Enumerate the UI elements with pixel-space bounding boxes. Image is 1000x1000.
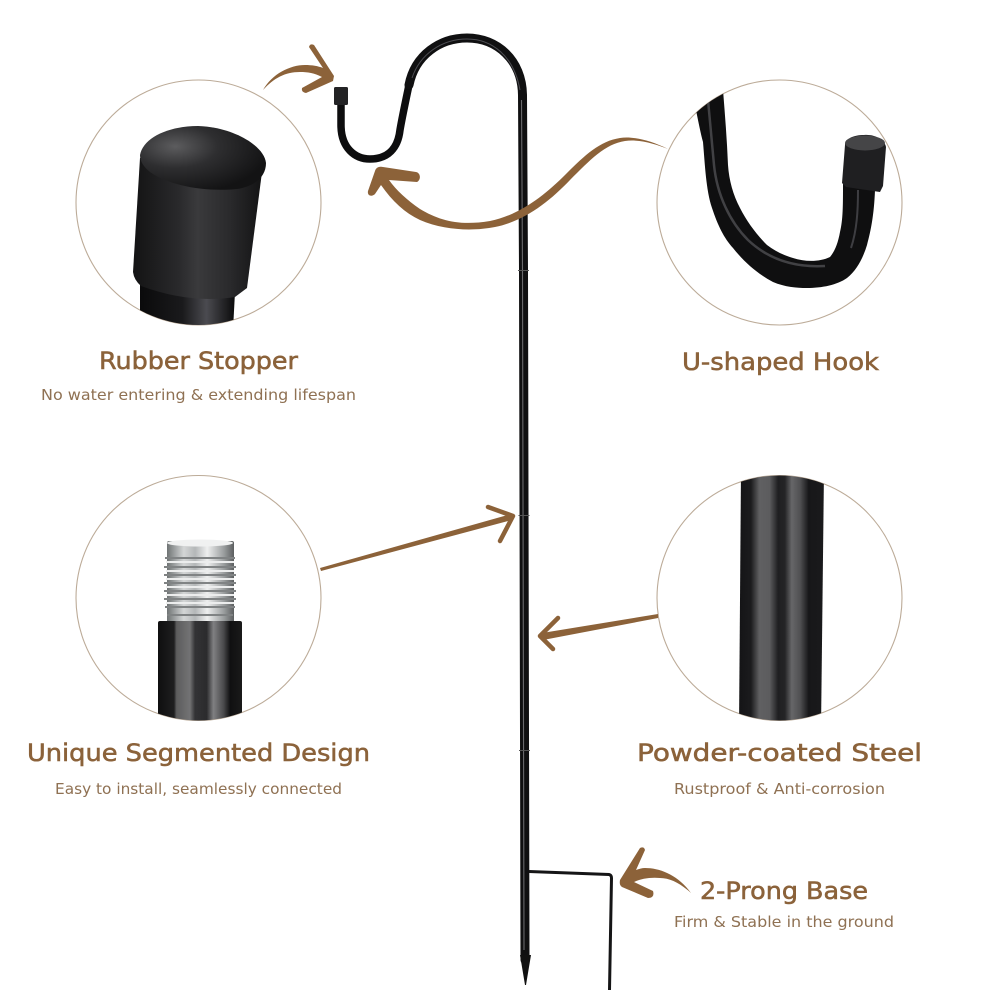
panel: u-shaped hook — [657, 80, 902, 325]
heading: rubber stopper: Rubber Stopper — [99, 347, 298, 375]
steel tube — [739, 470, 824, 730]
caption: powder-coated steel: Rustproof & Anti-corrosion — [674, 780, 885, 798]
heading: 2-prong base: 2-Prong Base — [700, 877, 868, 905]
heading: segmented design — [27, 739, 370, 798]
stopper body — [133, 150, 262, 299]
stopper cap — [140, 126, 266, 190]
threaded bolt — [164, 540, 236, 624]
heading: rubber stopper — [41, 347, 356, 404]
black segment tube — [158, 621, 242, 723]
hook cap — [842, 135, 886, 192]
stopper shaft — [140, 285, 235, 325]
arrow: to steel pole — [540, 614, 658, 649]
caption: segmented design: Easy to install, seamlessly connected — [55, 780, 342, 798]
panel: powder-coated steel — [657, 470, 902, 730]
arrow: to rubber stopper — [263, 44, 334, 93]
arrow: to u-shaped hook — [368, 137, 668, 229]
arrow: to prong base — [620, 847, 691, 898]
heading: segmented design: Unique Segmented Design — [27, 739, 370, 767]
arrow: to segment joint — [320, 507, 513, 571]
hook tube — [696, 90, 875, 288]
caption: rubber stopper: No water entering & extending lifespan — [41, 386, 356, 404]
panel: rubber stopper — [76, 80, 321, 330]
heading: powder-coated steel: Powder-coated Steel — [637, 739, 922, 767]
heading: powder-coated steel — [637, 739, 922, 798]
hook highlight — [708, 100, 825, 266]
heading: 2-prong base — [674, 877, 894, 931]
caption: 2-prong base: Firm & Stable in the ground — [674, 913, 894, 931]
panel: segmented design — [76, 476, 321, 723]
heading: u-shaped hook: U-shaped Hook — [682, 348, 879, 376]
shepherd hook pole — [334, 38, 612, 990]
